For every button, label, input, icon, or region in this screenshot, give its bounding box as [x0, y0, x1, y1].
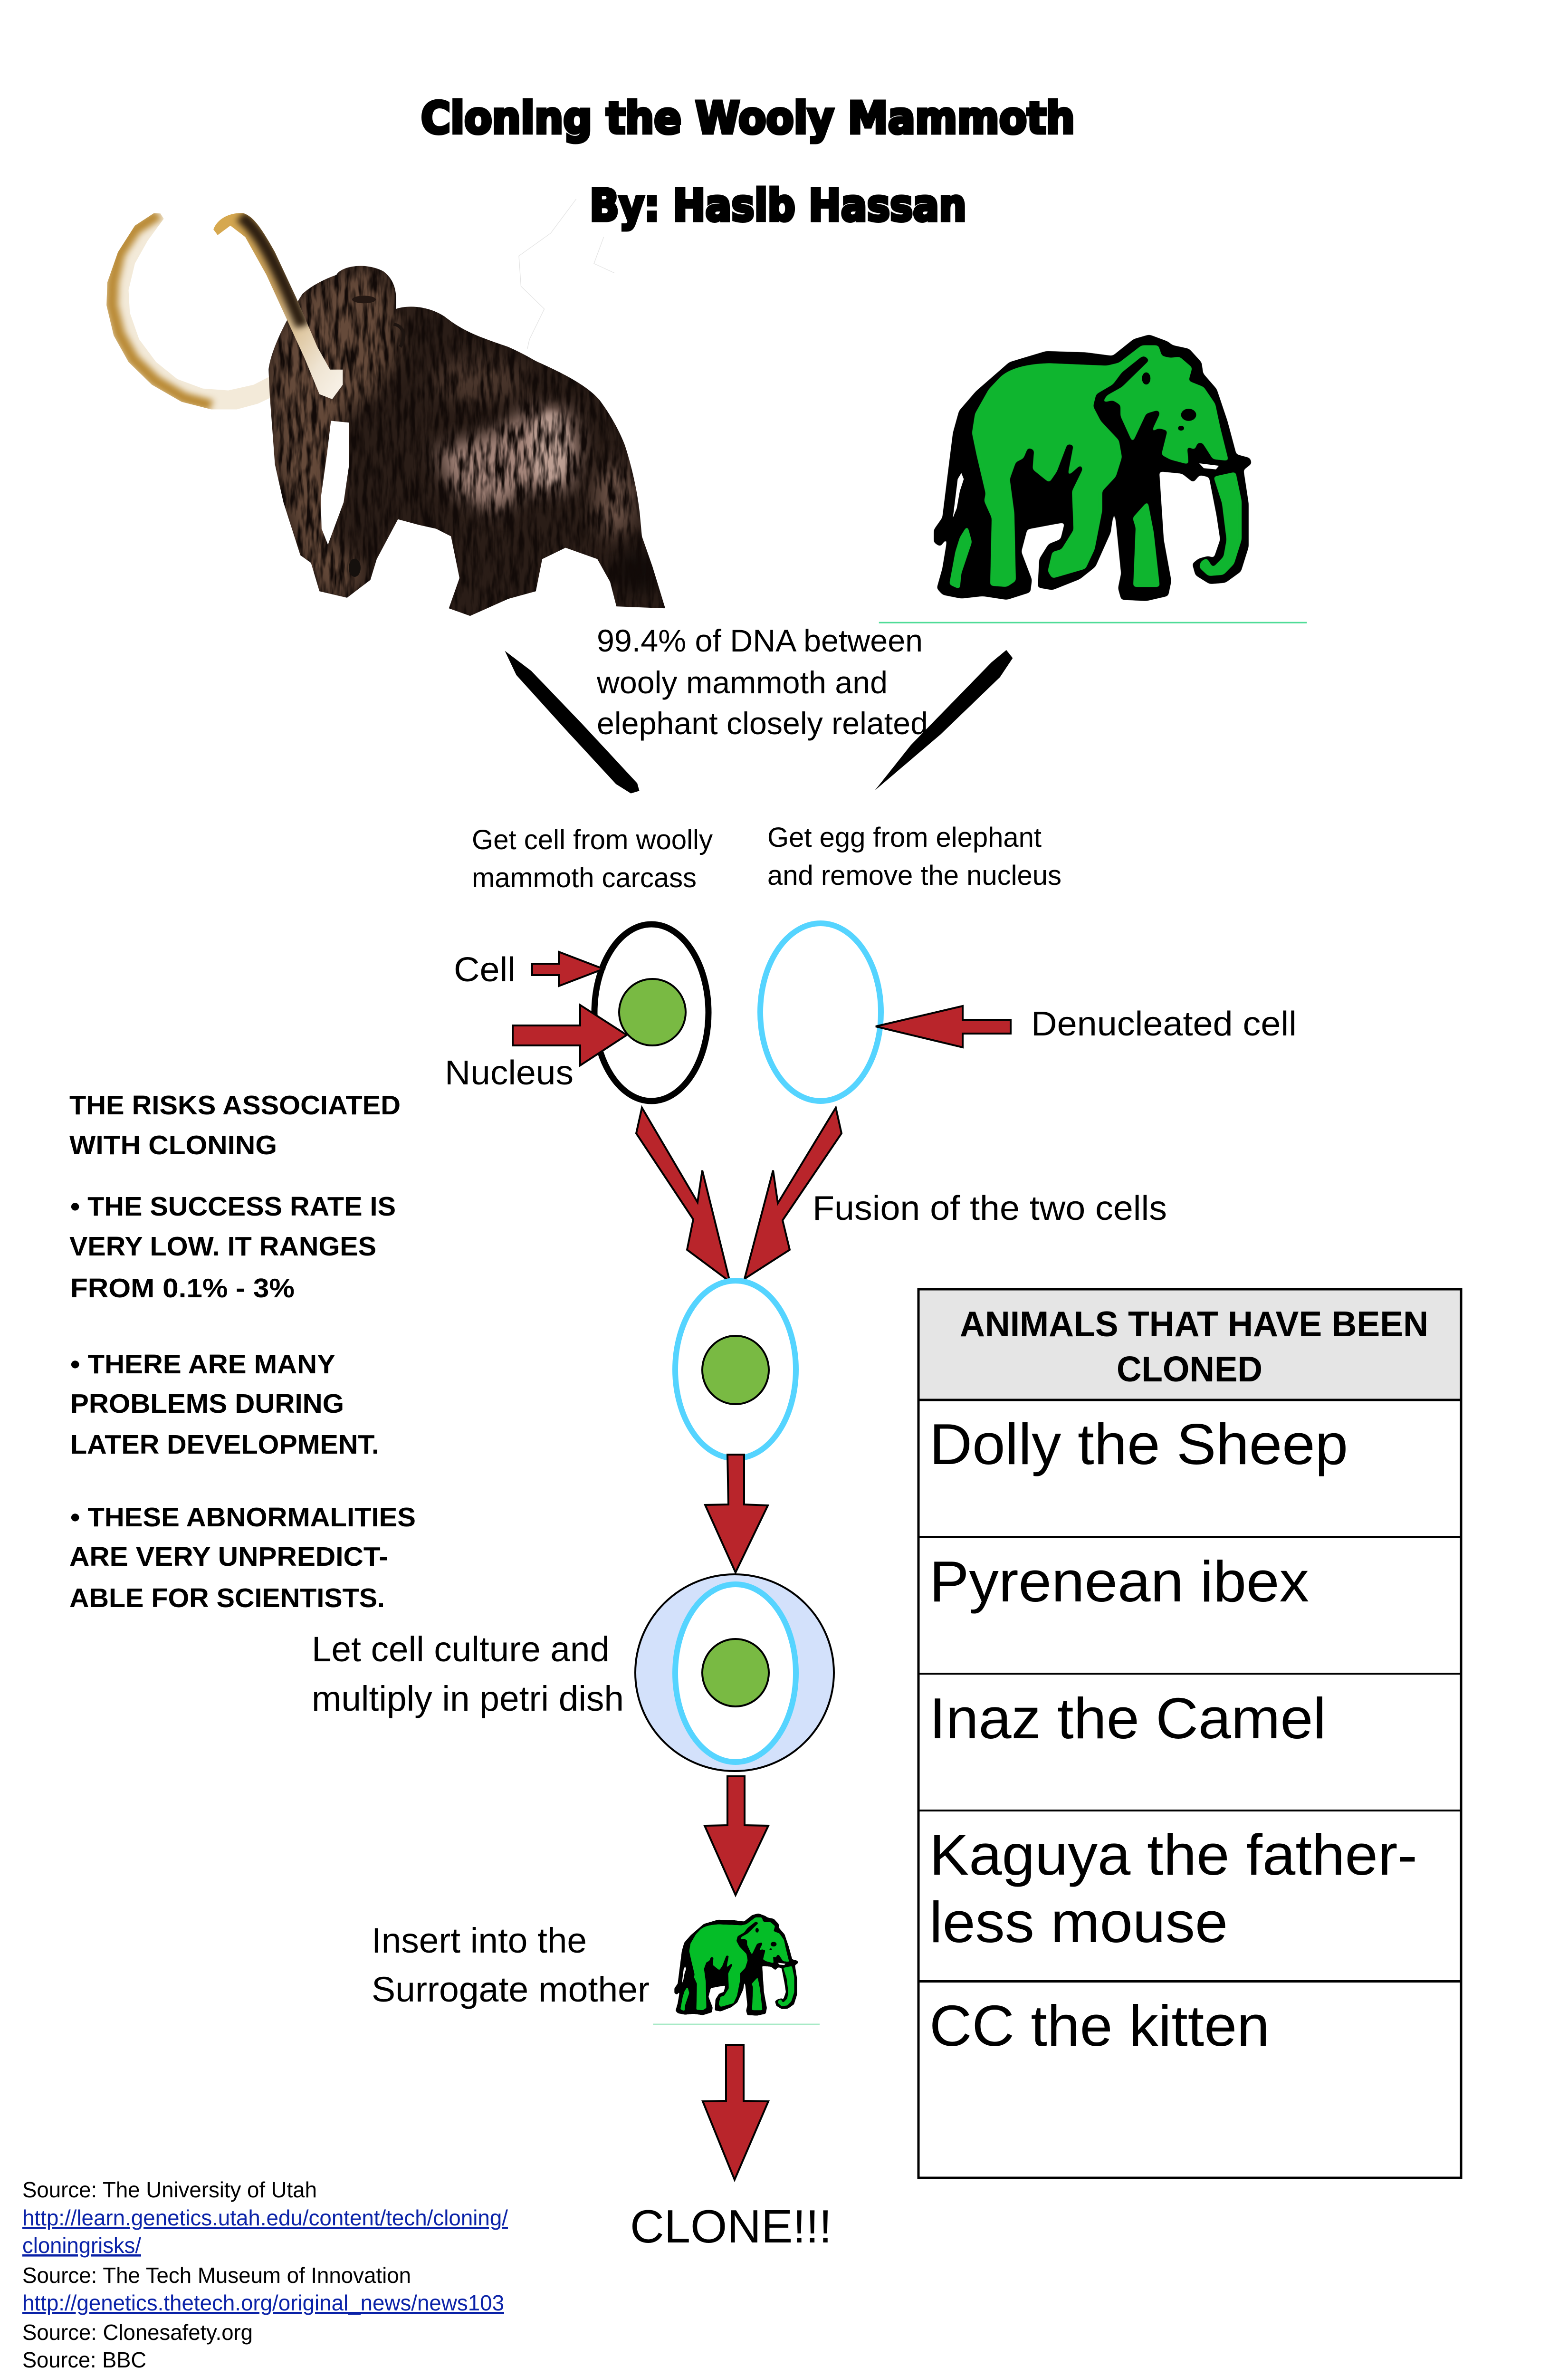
fused cell [675, 1281, 796, 1458]
mammoth far tusk [101, 211, 275, 415]
table body: CC the kitten [929, 1993, 1270, 2058]
arrow: mammoth cell to fusion [636, 1108, 730, 1282]
panel: risks of cloning: • THESE ABNORMALITIES [70, 1502, 416, 1533]
caption: elephant egg [767, 822, 1061, 891]
caption: surrogate: Insert into the [372, 1921, 587, 1960]
arrow: egg to fusion [745, 1108, 841, 1279]
sources [22, 2177, 508, 2376]
sources: Source: Clonesafety.org [22, 2320, 253, 2345]
illustration: green elephant [879, 335, 1307, 623]
panel: risks of cloning: • THERE ARE MANY [70, 1349, 335, 1380]
arrow: petri dish to surrogate [705, 1776, 768, 1895]
caption: elephant egg: Get egg from elephant [767, 822, 1042, 853]
sources: Source: The Tech Museum of Innovation [22, 2263, 411, 2288]
mammoth body [258, 260, 674, 623]
brush stroke: from elephant [875, 650, 1013, 790]
table body: Dolly the Sheep [929, 1412, 1348, 1476]
sources: Source: The University of Utah [22, 2177, 317, 2202]
title: Cloning the Wooly Mammoth [421, 93, 1075, 144]
panel: risks of cloning: LATER DEVELOPMENT. [70, 1429, 379, 1460]
caption: elephant egg: and remove the nucleus [767, 860, 1061, 891]
arrow: to nucleus [513, 1005, 627, 1065]
caption: petri dish [312, 1629, 624, 1718]
arrow: to cell [532, 952, 603, 986]
panel: risks of cloning: PROBLEMS DURING [70, 1389, 344, 1419]
table body [918, 1400, 1461, 2178]
mammoth eye and ear details [394, 324, 404, 347]
table body: Pyrenean ibex [929, 1549, 1309, 1614]
arrow: surrogate to clone [703, 2045, 768, 2180]
faint cut-out outline [519, 199, 614, 349]
panel: animals cloned table [918, 1289, 1461, 2178]
mammoth cell with nucleus [594, 924, 708, 1101]
caption: mammoth cell: mammoth carcass [472, 862, 697, 893]
panel: risks of cloning: ABLE FOR SCIENTISTS. [69, 1583, 385, 1613]
table body: Kaguya the father- [929, 1822, 1417, 1887]
brush stroke: from mammoth [505, 651, 640, 794]
caption: mammoth cell [472, 824, 713, 893]
mammoth near tusk [209, 211, 347, 404]
panel: risks of cloning: VERY LOW. IT RANGES [69, 1231, 376, 1262]
illustration: woolly mammoth [101, 199, 674, 623]
table body: less mouse [929, 1890, 1228, 1954]
table header: CLONED [1117, 1349, 1262, 1389]
label: clone: CLONE!!! [630, 2200, 832, 2252]
caption: petri dish: Let cell culture and [312, 1629, 610, 1669]
caption: mammoth cell: Get cell from woolly [472, 824, 713, 855]
sources: http://learn.genetics.utah.edu/content/tech/cloning/ [22, 2205, 508, 2230]
denucleated egg cell [760, 923, 881, 1101]
caption: petri dish: multiply in petri dish [312, 1679, 624, 1718]
panel: risks of cloning: ARE VERY UNPREDICT- [69, 1542, 388, 1572]
arrow: to denucleated cell [876, 1006, 1011, 1047]
table body: Inaz the Camel [929, 1686, 1326, 1751]
table header [918, 1289, 1461, 1400]
sources: Source: BBC [22, 2347, 146, 2372]
text: DNA similarity: wooly mammoth and [596, 665, 888, 700]
arrow: fusion to petri dish [705, 1455, 768, 1572]
caption: surrogate [372, 1921, 650, 2009]
caption: surrogate: Surrogate mother [372, 1970, 650, 2009]
label: Nucleus: Nucleus [445, 1054, 574, 1092]
table header: ANIMALS THAT HAVE BEEN [960, 1304, 1428, 1344]
gap between trunk and leg [321, 421, 349, 545]
label: Denucleated cell: Denucleated cell [1031, 1005, 1297, 1043]
petri dish with cell [635, 1574, 834, 1771]
panel: risks of cloning [69, 1090, 416, 1613]
panel: risks of cloning: FROM 0.1% - 3% [70, 1273, 295, 1303]
icon: surrogate elephant [653, 1914, 820, 2025]
subtitle: author: By: Hasib Hassan [590, 180, 966, 231]
panel: risks of cloning: • THE SUCCESS RATE IS [70, 1191, 396, 1222]
panel: risks of cloning: THE RISKS ASSOCIATED [69, 1090, 401, 1121]
label: Fusion: Fusion of the two cells [813, 1189, 1167, 1227]
text: DNA similarity [596, 623, 928, 741]
sources: http://genetics.thetech.org/original_news/news103 [22, 2290, 504, 2315]
label: Cell: Cell [454, 951, 516, 989]
sources: cloningrisks/ [22, 2233, 141, 2258]
text: DNA similarity: 99.4% of DNA between [597, 623, 923, 658]
text: DNA similarity: elephant closely related [597, 706, 928, 741]
panel: risks of cloning: WITH CLONING [69, 1130, 277, 1160]
